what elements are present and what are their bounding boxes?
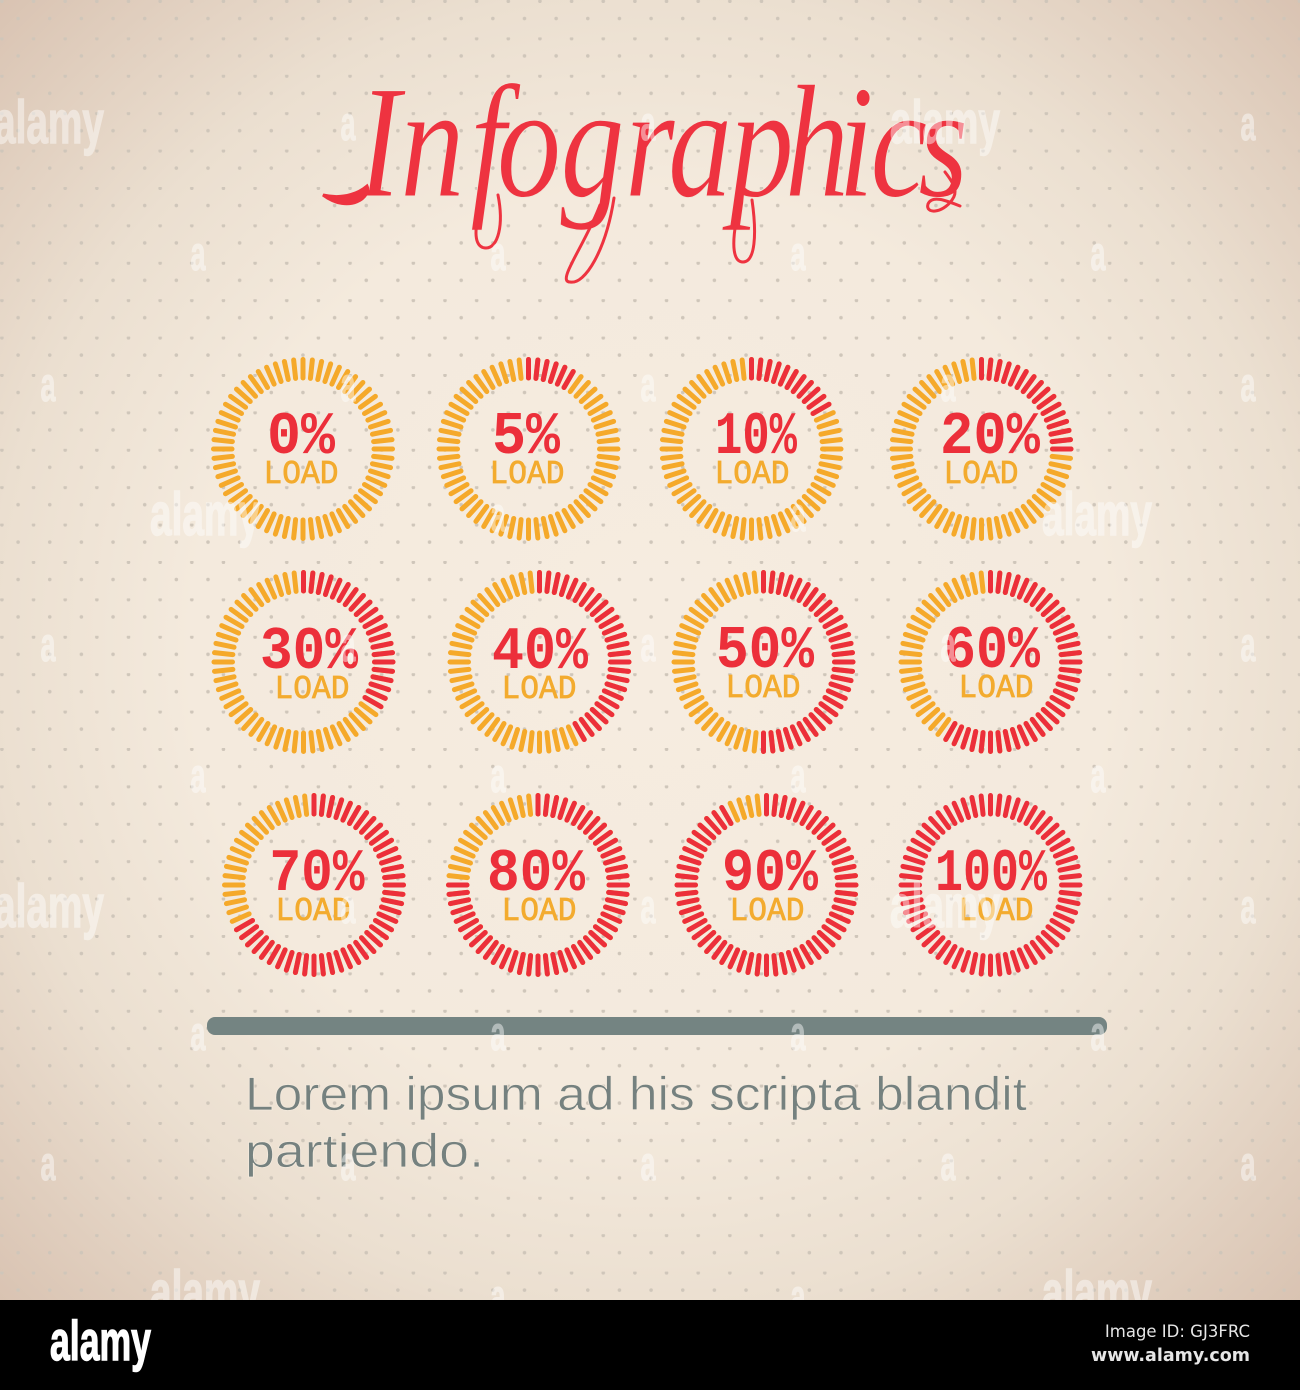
value: 80% <box>487 841 586 909</box>
watermarks: a <box>490 228 506 281</box>
watermarks: a <box>490 489 506 542</box>
watermarks: a <box>790 1008 806 1061</box>
gauge: 100% <box>895 789 1086 981</box>
value: 5% <box>492 404 561 472</box>
gauge: 30% <box>208 566 399 758</box>
label: LOAD <box>276 893 350 930</box>
gauge: 20% <box>886 353 1077 545</box>
watermarks: a <box>1090 1008 1106 1061</box>
value: 90% <box>722 841 819 909</box>
gauge: 70% <box>218 789 410 981</box>
label: LOAD <box>502 671 576 708</box>
watermarks: alamy <box>150 1259 260 1326</box>
watermarks: a <box>490 1008 506 1061</box>
body text: partiendo. <box>245 1124 484 1177</box>
label: LOAD <box>958 893 1034 930</box>
watermarks: a <box>1240 881 1256 934</box>
watermarks: alamy <box>150 481 260 548</box>
value: 20% <box>940 404 1041 472</box>
watermarks: a <box>1240 98 1256 151</box>
label: LOAD <box>726 670 800 707</box>
body text <box>245 1067 1027 1177</box>
watermarks: a <box>40 1138 56 1191</box>
gauge: 10% <box>656 353 847 545</box>
value: 100% <box>935 841 1048 909</box>
ring ticks <box>207 353 399 545</box>
watermarks: a <box>340 619 356 672</box>
ring ticks <box>671 789 862 981</box>
label: LOAD <box>944 456 1018 493</box>
watermarks: a <box>640 619 656 672</box>
website: www.alamy.com <box>1091 1346 1250 1366</box>
value: 50% <box>716 618 815 686</box>
label: LOAD <box>730 893 804 930</box>
watermarks: a <box>1240 619 1256 672</box>
watermarks: a <box>1090 228 1106 281</box>
label: LOAD <box>958 670 1034 707</box>
watermarks: a <box>340 1138 356 1191</box>
label: LOAD <box>264 456 338 493</box>
label: LOAD <box>714 456 790 493</box>
value: 70% <box>270 841 365 909</box>
ring ticks <box>895 789 1086 981</box>
footer band <box>0 1300 1300 1390</box>
ring ticks <box>668 566 859 758</box>
watermarks: a <box>640 881 656 934</box>
ring ticks <box>886 353 1077 545</box>
title: Infographics <box>357 52 968 231</box>
ring ticks <box>895 566 1086 758</box>
watermarks: a <box>340 881 356 934</box>
body text: Lorem ipsum ad his scripta blandit <box>245 1067 1027 1120</box>
gauge: 0% <box>207 353 399 545</box>
watermarks: a <box>1240 1138 1256 1191</box>
ring ticks <box>218 789 410 981</box>
ring ticks <box>656 353 847 545</box>
watermarks: alamy <box>890 873 1000 940</box>
footer logo: alamy <box>50 1309 151 1372</box>
watermarks: a <box>790 1271 806 1324</box>
watermarks: a <box>790 228 806 281</box>
ring ticks <box>442 789 634 981</box>
watermarks: a <box>640 359 656 412</box>
watermarks: a <box>790 489 806 542</box>
value: 0% <box>267 404 336 472</box>
watermarks: alamy <box>1042 481 1152 548</box>
watermarks: a <box>190 228 206 281</box>
watermarks: a <box>340 359 356 412</box>
watermarks: a <box>940 619 956 672</box>
watermarks: a <box>1240 359 1256 412</box>
value: 30% <box>260 619 359 687</box>
watermarks: a <box>940 1138 956 1191</box>
label: LOAD <box>274 671 350 708</box>
divider bar <box>207 1017 1107 1035</box>
gauge: 80% <box>442 789 634 981</box>
watermarks: a <box>190 750 206 803</box>
watermarks: a <box>790 750 806 803</box>
watermarks: a <box>490 1271 506 1324</box>
gauge: 50% <box>668 566 859 758</box>
watermarks: a <box>340 98 356 151</box>
panel: load gauges <box>207 353 1086 981</box>
value: 60% <box>944 618 1041 686</box>
watermarks: a <box>640 98 656 151</box>
gauge: 5% <box>433 353 624 545</box>
watermarks: a <box>490 750 506 803</box>
image id: Image ID: GJ3FRC <box>1105 1322 1250 1341</box>
watermarks: a <box>1090 750 1106 803</box>
gauge: 60% <box>895 566 1086 758</box>
watermarks: alamy <box>1042 1259 1152 1326</box>
watermarks: a <box>940 359 956 412</box>
gauge: 40% <box>444 566 635 758</box>
value: 40% <box>492 619 589 687</box>
label: LOAD <box>502 893 576 930</box>
ring ticks <box>444 566 635 758</box>
watermarks: a <box>40 359 56 412</box>
ring ticks <box>433 353 624 545</box>
watermarks: a <box>190 1008 206 1061</box>
watermarks: a <box>640 1138 656 1191</box>
watermarks: a <box>40 619 56 672</box>
label: LOAD <box>490 456 564 493</box>
gauge: 90% <box>671 789 862 981</box>
value: 10% <box>715 404 798 472</box>
ring ticks <box>208 566 399 758</box>
watermarks: alamy <box>890 89 1000 156</box>
